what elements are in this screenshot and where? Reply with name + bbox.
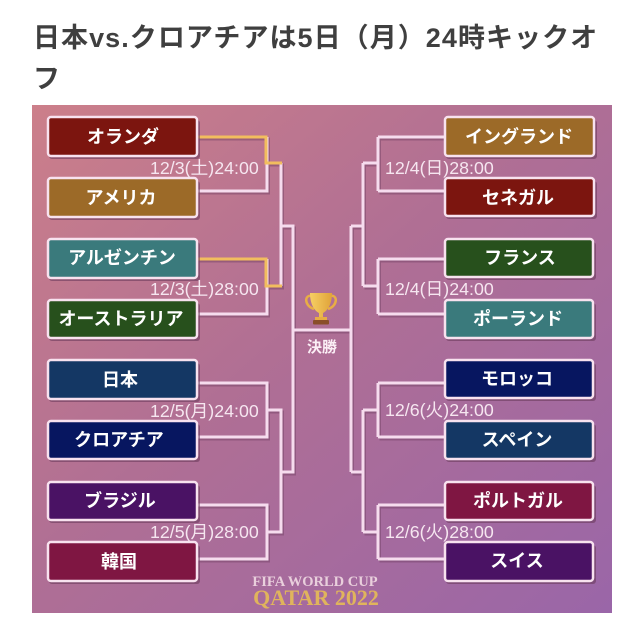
right team: ポーランド: ポーランド xyxy=(473,308,563,329)
left team: アメリカ xyxy=(48,178,200,220)
logo: FIFA World Cup Qatar 2022: QATAR 2022 xyxy=(253,585,379,610)
left team: オランダ xyxy=(48,117,200,159)
date: イングランド vs セネガル: 12/4(日)28:00 xyxy=(385,158,494,178)
right team: イングランド: イングランド xyxy=(465,126,573,147)
date: ブラジル vs 韓国: 12/5(月)28:00 xyxy=(150,522,259,542)
left team: オーストラリア xyxy=(48,300,200,341)
panel background xyxy=(32,105,612,613)
date: フランス vs ポーランド: 12/4(日)24:00 xyxy=(385,279,494,299)
left team: ブラジル: ブラジル xyxy=(84,490,156,511)
date: モロッコ vs スペイン: 12/6(火)24:00 xyxy=(385,400,494,420)
right team: セネガル xyxy=(445,178,597,219)
left team: ブラジル xyxy=(48,482,200,523)
left team: クロアチア xyxy=(48,421,200,462)
right team: フランス xyxy=(445,239,596,280)
date: オランダ vs アメリカ: 12/3(土)24:00 xyxy=(150,158,259,178)
right team: ポーランド xyxy=(445,300,596,341)
right team: スペイン xyxy=(445,421,596,462)
date: ポルトガル vs スイス: 12/6(火)28:00 xyxy=(385,522,494,542)
right team: フランス: フランス xyxy=(484,248,556,268)
left team: オーストラリア: オーストラリア xyxy=(58,309,184,329)
label: final: 決勝 xyxy=(307,338,337,356)
right team: モロッコ: モロッコ xyxy=(481,369,553,389)
right team: スペイン: スペイン xyxy=(482,430,552,450)
date: 日本 vs クロアチア: 12/5(月)24:00 xyxy=(150,401,259,421)
left team: アルゼンチン: アルゼンチン xyxy=(68,247,176,268)
date: アルゼンチン vs オーストラリア: 12/3(土)28:00 xyxy=(150,279,259,299)
bracket lines xyxy=(198,137,446,561)
left team: オランダ: オランダ xyxy=(87,126,159,147)
left team: 韓国: 韓国 xyxy=(101,552,137,572)
right team: スイス xyxy=(445,542,596,584)
right team: ポルトガル xyxy=(445,482,596,523)
left team: クロアチア: クロアチア xyxy=(74,430,164,450)
right team: セネガル: セネガル xyxy=(482,188,554,208)
logo: FIFA World Cup Qatar 2022 xyxy=(252,574,379,610)
right team: イングランド xyxy=(445,117,597,159)
right team: ポルトガル: ポルトガル xyxy=(473,490,563,511)
right team: スイス: スイス xyxy=(490,551,544,571)
logo: FIFA World Cup Qatar 2022: FIFA WORLD CUP xyxy=(252,574,378,590)
left team: 韓国 xyxy=(48,542,200,584)
icon: trophy xyxy=(306,293,336,324)
left team: 日本: 日本 xyxy=(102,370,138,390)
right team: モロッコ xyxy=(445,360,596,401)
left team: 日本 xyxy=(48,360,200,402)
left team: アルゼンチン xyxy=(48,239,200,281)
title: 日本vs.クロアチアは5日（月）24時キックオフ xyxy=(33,23,598,94)
left team: アメリカ: アメリカ xyxy=(85,188,157,208)
